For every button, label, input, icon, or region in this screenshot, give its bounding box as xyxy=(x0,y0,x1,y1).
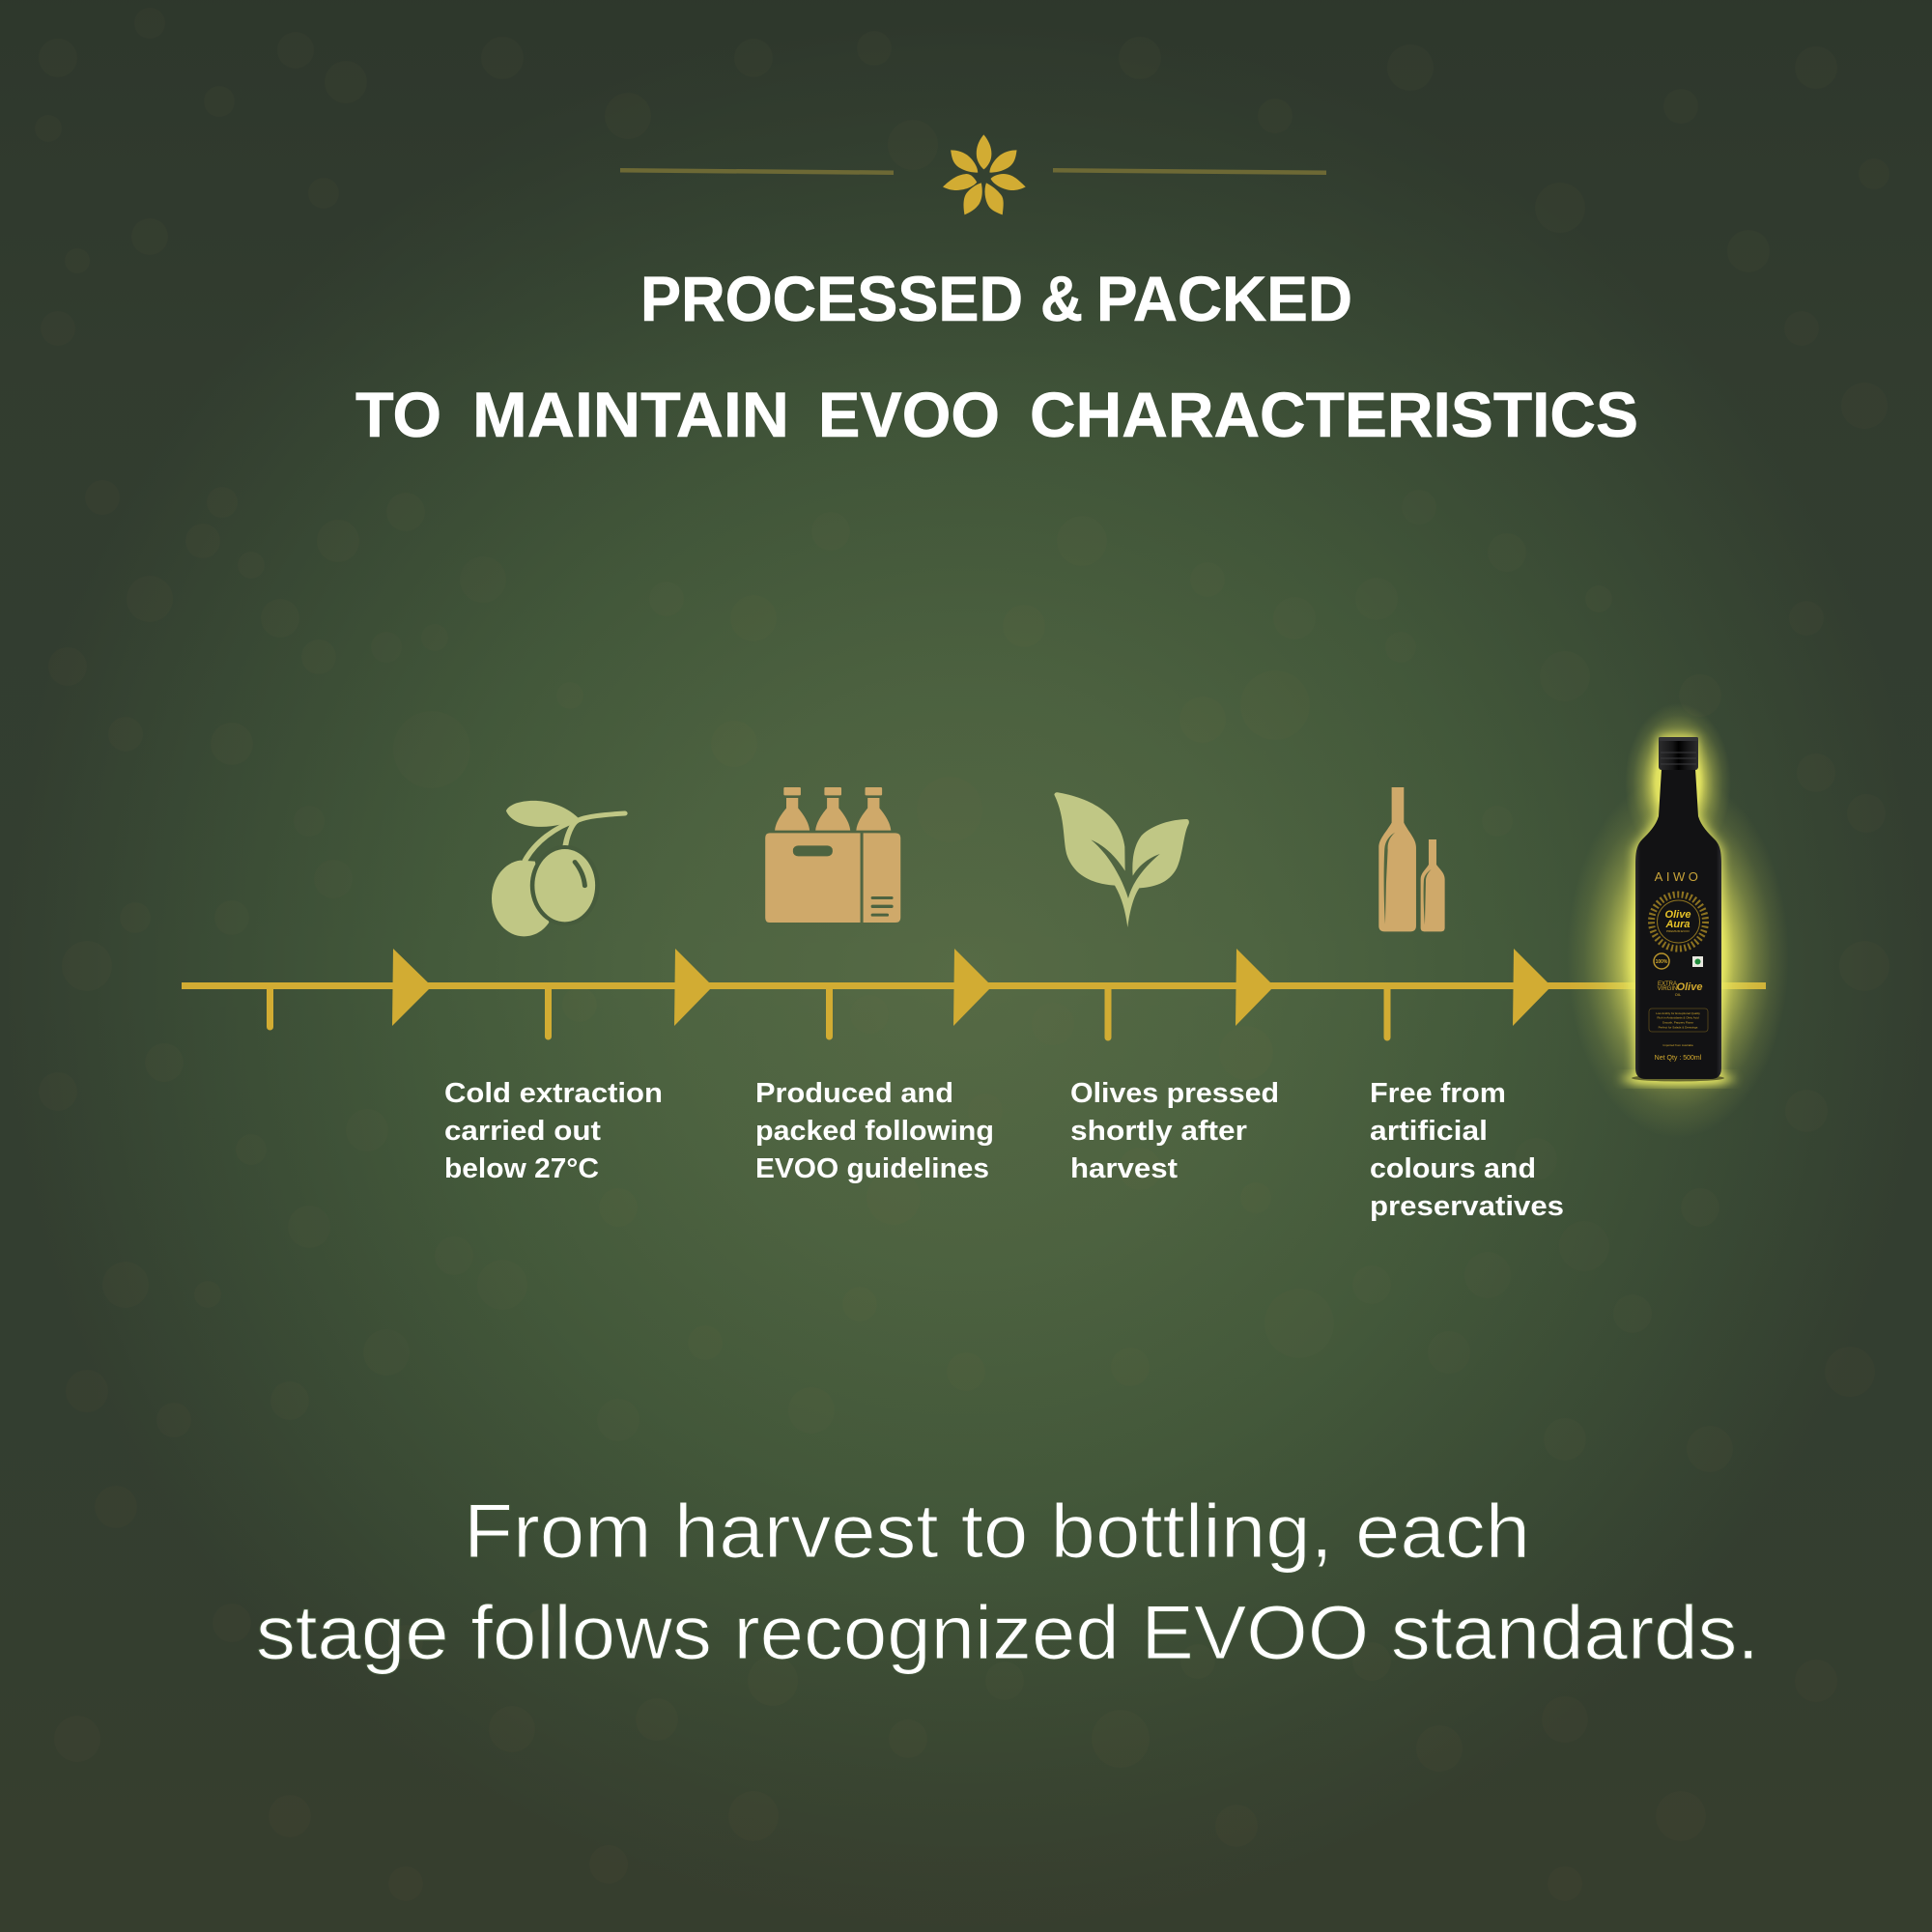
title xyxy=(355,263,1638,450)
title: & xyxy=(1040,263,1083,334)
caption: cold extraction: below 27°C xyxy=(444,1153,599,1184)
caption: cold extraction: Cold extraction xyxy=(444,1078,663,1109)
bottle label: Low Acidity for Exceptional Quality xyxy=(1656,1011,1700,1015)
bottle label: 100% xyxy=(1656,959,1668,965)
icon: box of bottles xyxy=(765,787,900,923)
icon: two bottles xyxy=(1378,787,1445,931)
caption: free from artificial xyxy=(1370,1078,1564,1222)
bottle label: PREMIUM EVOO xyxy=(1666,929,1690,933)
bottle label: Net Qty : 500ml xyxy=(1655,1055,1702,1062)
caption: produced and packed: Produced and xyxy=(755,1078,953,1109)
caption: free from artificial: artificial xyxy=(1370,1116,1488,1147)
caption: free from artificial: Free from xyxy=(1370,1078,1506,1109)
icon: olives xyxy=(492,801,625,936)
icon: gold flower xyxy=(943,134,1026,214)
caption: cold extraction xyxy=(444,1078,663,1184)
icon: leaves xyxy=(1054,792,1189,927)
caption: olives pressed: harvest xyxy=(1070,1153,1178,1184)
caption: olives pressed: shortly after xyxy=(1070,1116,1247,1147)
bottle label: Aura xyxy=(1664,919,1690,930)
title: MAINTAIN xyxy=(472,379,789,450)
product: olive oil bottle with glow xyxy=(1567,703,1789,1138)
title: TO xyxy=(355,379,441,450)
bottle label: Smooth, Peppery Flavor xyxy=(1662,1020,1693,1024)
bottle cap xyxy=(1659,737,1698,770)
title: EVOO xyxy=(818,379,1000,450)
ornament: divider lines and flower xyxy=(620,134,1326,214)
bottle label: EXTRA xyxy=(1658,981,1677,987)
closing statement: stage follows recognized EVOO standards. xyxy=(256,1589,1759,1675)
caption: olives pressed xyxy=(1070,1078,1279,1184)
caption: cold extraction: carried out xyxy=(444,1116,601,1147)
bottle label: Perfect for Salads & Dressings xyxy=(1659,1026,1698,1030)
title: CHARACTERISTICS xyxy=(1030,379,1638,450)
caption: free from artificial: preservatives xyxy=(1370,1191,1564,1222)
caption: produced and packed: EVOO guidelines xyxy=(755,1153,989,1184)
step captions xyxy=(444,1078,1564,1222)
caption: free from artificial: colours and xyxy=(1370,1153,1536,1184)
bottle label: Olive xyxy=(1665,909,1690,921)
caption: produced and packed xyxy=(755,1078,994,1184)
bottle label xyxy=(1649,869,1708,1062)
caption: olives pressed: Olives pressed xyxy=(1070,1078,1279,1109)
bottle body xyxy=(1635,769,1721,1079)
title: PROCESSED xyxy=(640,263,1023,334)
closing statement: From harvest to bottling, each xyxy=(464,1488,1530,1574)
timeline xyxy=(182,949,1766,1041)
bottle label: VIRGIN xyxy=(1658,986,1677,992)
title: PACKED xyxy=(1096,263,1352,334)
bottle label: Olive xyxy=(1677,981,1702,993)
caption: produced and packed: packed following xyxy=(755,1116,994,1147)
bottle label: Rich in Antioxidants & Oleic Acid xyxy=(1657,1016,1699,1020)
bottle label: OIL xyxy=(1675,992,1682,997)
bottle label: AIWO xyxy=(1655,869,1701,884)
bottle label: Imported from Australia xyxy=(1662,1043,1693,1047)
closing statement xyxy=(256,1488,1759,1675)
